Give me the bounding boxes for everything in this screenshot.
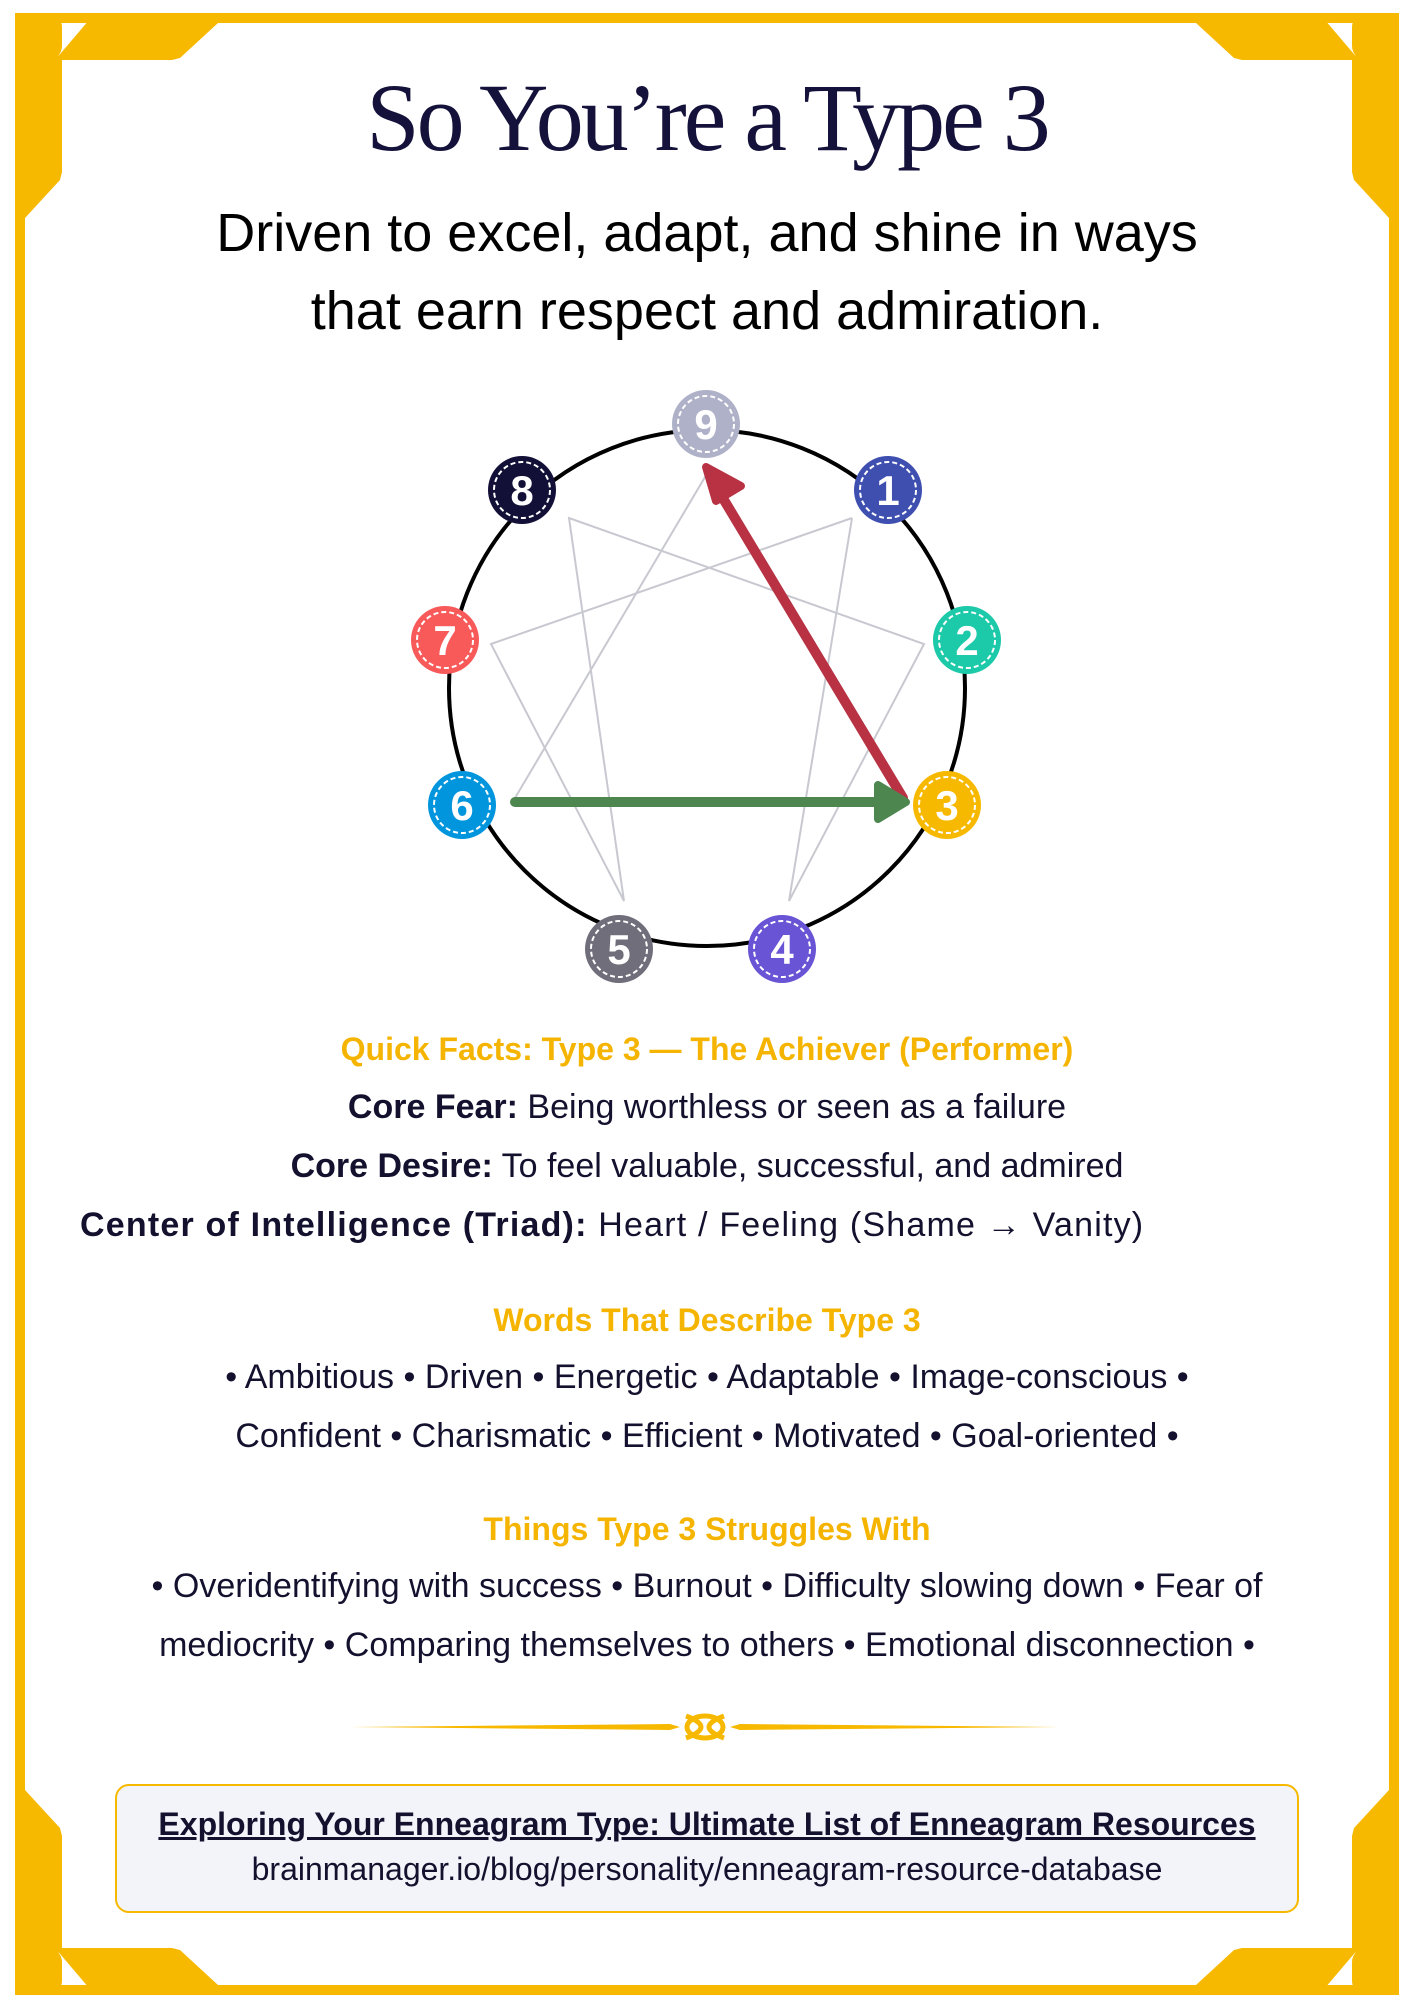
subtitle — [216, 203, 1198, 341]
struggles heading: Things Type 3 Struggles With — [483, 1511, 931, 1547]
type nodes: 8 — [510, 467, 534, 514]
type nodes: 5 — [607, 926, 631, 973]
struggles list — [152, 1567, 1262, 1664]
type nodes: 9 — [694, 401, 718, 448]
quick facts lines: Core Fear: Being worthless or seen as a failure — [348, 1088, 1066, 1126]
type nodes: 3 — [935, 782, 959, 829]
arrow: stress to 9 — [706, 467, 903, 798]
resource link box: brainmanager.io/blog/personality/enneagram-resource-database — [252, 1851, 1162, 1887]
struggles list: • Overidentifying with success • Burnout • Difficulty slowing down • Fear of — [152, 1567, 1262, 1605]
subtitle: that earn respect and admiration. — [311, 281, 1103, 341]
arrow: growth from 6 — [515, 785, 906, 819]
words list — [225, 1358, 1189, 1455]
struggles list: mediocrity • Comparing themselves to others • Emotional disconnection • — [159, 1626, 1255, 1664]
grey star lines — [491, 472, 924, 901]
type nodes: 4 — [770, 926, 794, 973]
words list: Confident • Charismatic • Efficient • Motivated • Goal-oriented • — [235, 1417, 1179, 1455]
type nodes: 2 — [955, 617, 979, 664]
subtitle: Driven to excel, adapt, and shine in ways — [216, 203, 1198, 263]
resource link box: Exploring Your Enneagram Type: Ultimate List of Enneagram Resources — [158, 1806, 1256, 1842]
triad line: Center of Intelligence (Triad): Heart / Feeling (Shame → Vanity) — [80, 1206, 1144, 1244]
type nodes: 6 — [450, 782, 474, 829]
quick facts heading: Quick Facts: Type 3 — The Achiever (Performer) — [341, 1031, 1073, 1067]
quick facts lines: Core Desire: To feel valuable, successful, and admired — [291, 1147, 1123, 1185]
words heading: Words That Describe Type 3 — [493, 1302, 921, 1338]
quick facts lines — [291, 1088, 1123, 1185]
enneagram diagram — [411, 390, 1001, 983]
resource link box — [115, 1784, 1299, 1913]
type nodes: 7 — [433, 617, 457, 664]
type nodes: 1 — [876, 467, 900, 514]
words list: • Ambitious • Driven • Energetic • Adaptable • Image-conscious • — [225, 1358, 1189, 1396]
divider ornament — [352, 1714, 1058, 1740]
title: So You’re a Type 3 — [366, 64, 1048, 171]
type nodes — [411, 390, 1001, 983]
